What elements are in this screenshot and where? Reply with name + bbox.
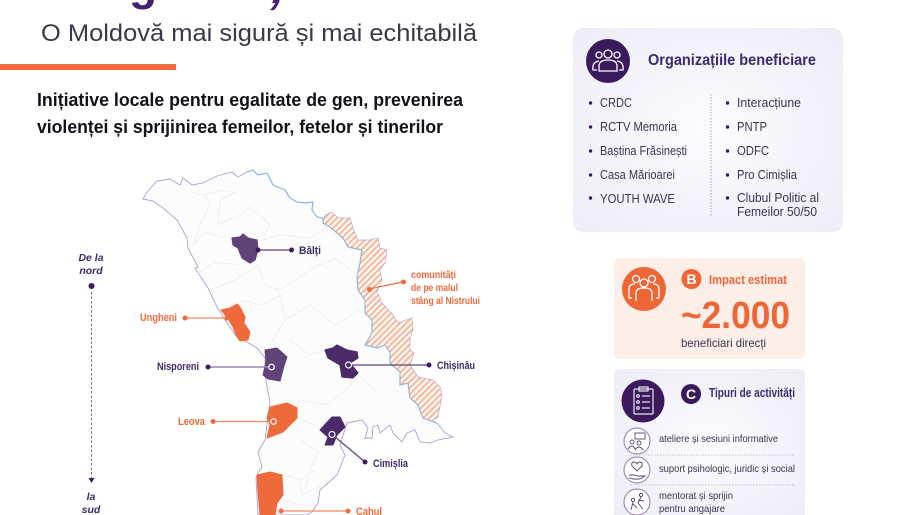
panel: beneficiary organisations bbox=[573, 28, 843, 232]
district: Ungheni bbox=[221, 304, 250, 341]
title (cropped at top edge) bbox=[129, 0, 295, 14]
district: Chișinău bbox=[325, 345, 358, 378]
heading: Inițiative locale pentru egalitate de gen, prevenirea bbox=[37, 90, 464, 110]
orange accent bar bbox=[0, 64, 176, 70]
district: Leova bbox=[267, 403, 297, 438]
badge B: B bbox=[686, 271, 697, 287]
badge C bbox=[681, 384, 701, 404]
north to south indicator: la bbox=[87, 491, 96, 503]
activity: support bbox=[624, 457, 795, 483]
left column list: Casa Mărioarei bbox=[600, 168, 675, 182]
panel heading: Organizațiile beneficiare bbox=[648, 52, 816, 69]
district: Nisporeni bbox=[263, 348, 287, 381]
activity: mentoring bbox=[624, 489, 733, 515]
activity: mentoring: mentorat și sprijin bbox=[659, 490, 733, 502]
country outline bbox=[143, 170, 453, 515]
activity: support: suport psihologic, juridic și social bbox=[659, 463, 795, 475]
label: Nisporeni bbox=[157, 361, 274, 373]
label: Ungheni bbox=[140, 312, 230, 324]
badge C: C bbox=[686, 386, 696, 402]
right column list: ODFC bbox=[737, 144, 769, 158]
subtitle: O Moldovă mai sigură și mai echitabilă bbox=[41, 20, 478, 47]
left column list bbox=[589, 96, 687, 206]
impact heading: Impact estimat bbox=[709, 272, 788, 287]
label: left-bank communities: de pe malul bbox=[411, 282, 458, 294]
north to south indicator: nord bbox=[79, 265, 103, 277]
district: Cahul bbox=[257, 472, 283, 515]
right column list: Clubul Politic al bbox=[737, 191, 819, 205]
icon: group of people bbox=[586, 39, 630, 83]
right column list: Pro Cimișlia bbox=[737, 168, 797, 182]
right column list: PNTP bbox=[737, 120, 767, 134]
hatched area: left bank of the Nistru bbox=[323, 212, 442, 421]
district: Bălți bbox=[232, 234, 258, 263]
activity: workshops bbox=[624, 428, 778, 454]
label: Chișinău: Chișinău bbox=[437, 360, 475, 372]
label: Cahul bbox=[278, 506, 382, 515]
label: left-bank communities: stâng al Nistrului bbox=[411, 295, 480, 307]
map of Moldova bbox=[140, 170, 480, 515]
label: Ungheni: Ungheni bbox=[140, 312, 177, 324]
heading bbox=[37, 90, 464, 137]
right column list: Femeilor 50/50 bbox=[737, 205, 817, 219]
left column list: YOUTH WAVE bbox=[600, 192, 675, 206]
label: Leova bbox=[178, 416, 276, 428]
label: Leova: Leova bbox=[178, 416, 206, 428]
left column list: Baștina Frăsinești bbox=[600, 144, 687, 158]
label: Nisporeni: Nisporeni bbox=[157, 361, 199, 373]
impact number: ~2.000 bbox=[681, 295, 790, 337]
label: left-bank communities: comunități bbox=[411, 269, 456, 281]
north to south indicator: De la bbox=[78, 252, 104, 264]
activity: workshops: ateliere și sesiuni informative bbox=[659, 433, 778, 445]
icon: beneficiaries bbox=[622, 267, 666, 311]
label: Bălți: Bălți bbox=[299, 245, 321, 257]
impact caption: beneficiari direcți bbox=[681, 336, 766, 350]
activities heading: Tipuri de activități bbox=[709, 385, 795, 400]
label: Cimișlia bbox=[329, 432, 409, 470]
left column list: RCTV Memoria bbox=[600, 120, 677, 134]
label: Bălți bbox=[256, 245, 321, 257]
Nistru river bbox=[247, 170, 437, 423]
heading: violenței și sprijinirea femeilor, fetelor și tinerilor bbox=[37, 117, 443, 137]
north to south indicator bbox=[78, 252, 104, 515]
panel: estimated impact bbox=[614, 258, 805, 359]
icon: clipboard checklist bbox=[622, 380, 664, 422]
label: Chișinău bbox=[346, 360, 475, 372]
district: Cimișlia bbox=[320, 417, 345, 445]
panel: activity types bbox=[614, 369, 805, 515]
left column list: CRDC bbox=[600, 96, 632, 110]
activity: mentoring: pentru angajare bbox=[659, 503, 725, 515]
right column list bbox=[726, 96, 819, 219]
label: Cimișlia: Cimișlia bbox=[373, 458, 409, 470]
badge B bbox=[682, 269, 702, 289]
right column list: Interacțiune bbox=[737, 96, 801, 110]
district boundaries bbox=[190, 190, 375, 505]
label: left-bank communities bbox=[367, 269, 480, 307]
